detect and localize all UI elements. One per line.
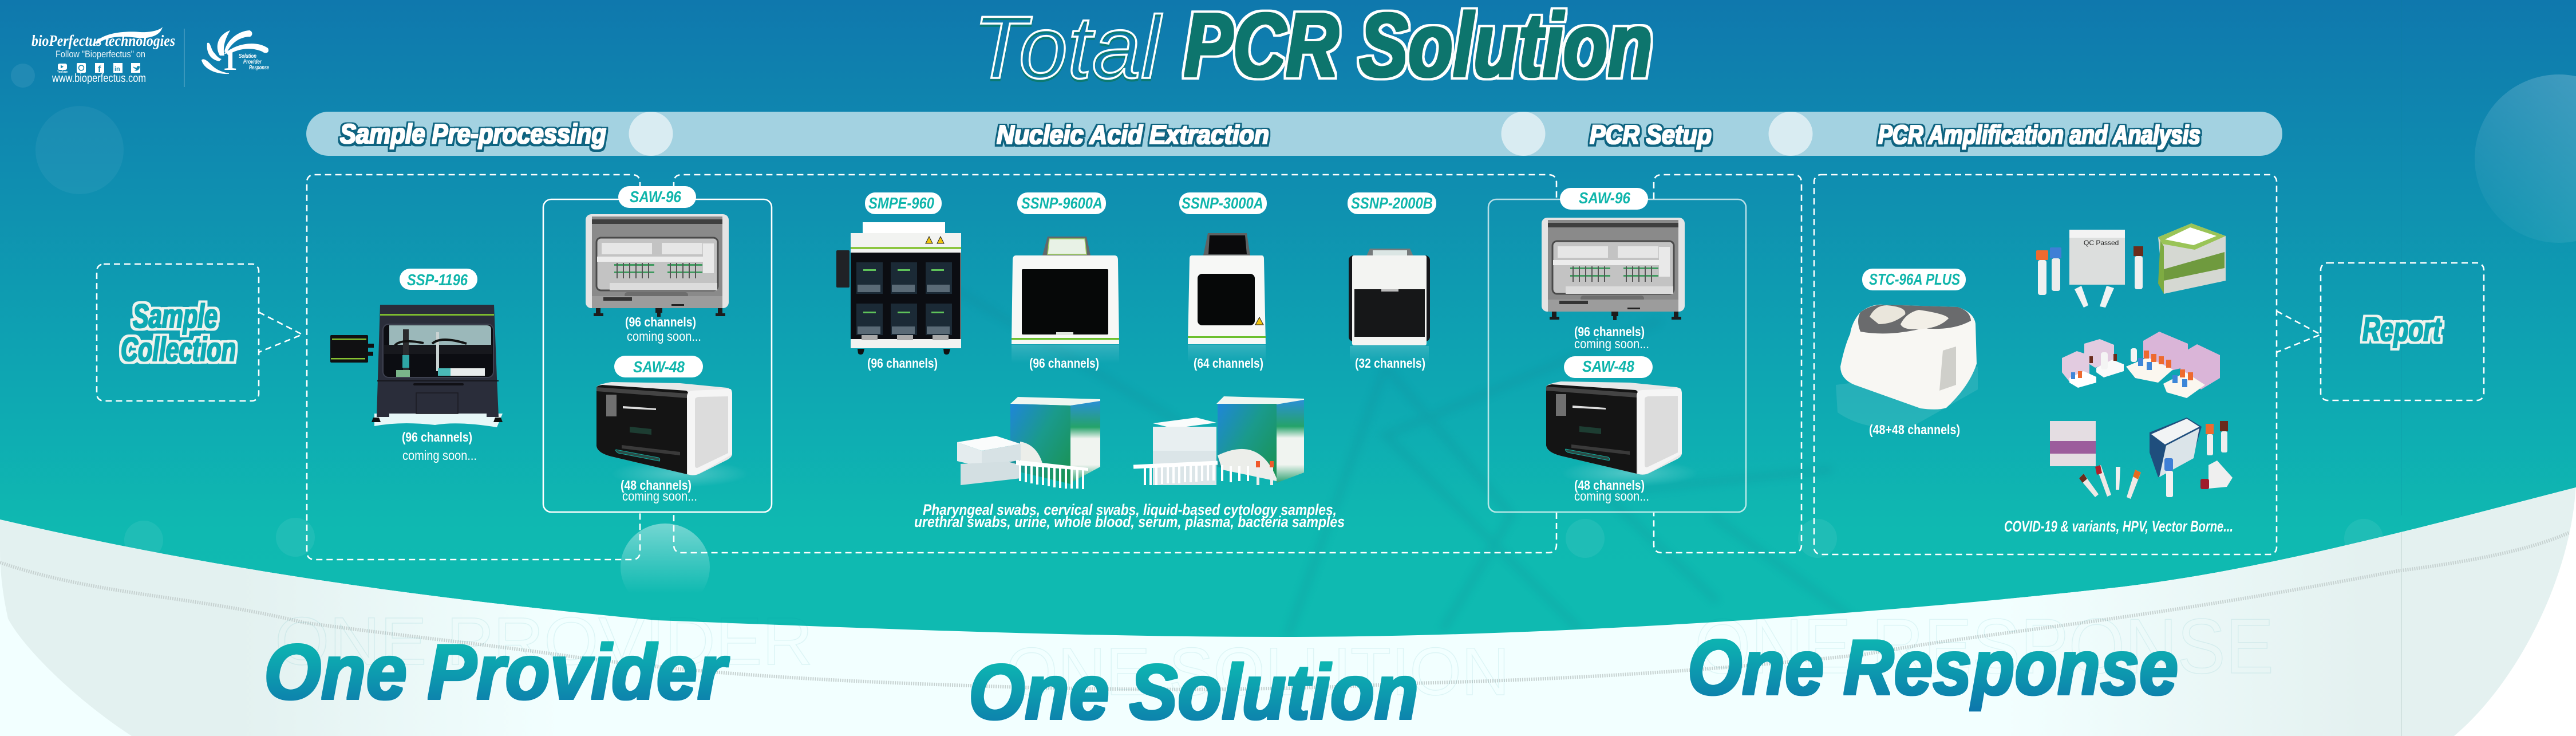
pill SAW-96: [1560, 188, 1648, 210]
pill SAW-48: [614, 356, 703, 377]
ghost outline words: ONE SOLUTION: [1006, 634, 1510, 710]
product row 3: PCR kits: [2050, 418, 2233, 499]
step: PCR amplification and analysis: PCR Amplification and Analysis: [1878, 120, 2200, 149]
status SAW-48: coming soon...: [1574, 489, 1649, 503]
product: extraction kit 1: [957, 397, 1100, 489]
one-solution logo mark: Response: [249, 65, 269, 71]
arrow: amplification to report: [2277, 311, 2321, 352]
brand logo block: [31, 27, 175, 85]
pill SAW-96: SAW-96: [630, 188, 681, 206]
seam line: [2401, 532, 2402, 736]
title word: Total: Total: [973, 0, 1163, 99]
one-solution logo mark: Provider: [243, 59, 262, 65]
heading: One Solution: One Solution: [969, 648, 1419, 735]
sample types text: urethral swabs, urine, whole blood, serum, plasma, bacteria samples: [914, 513, 1345, 530]
instrument: [1188, 233, 1266, 362]
product row 2: PCR kits: [2062, 332, 2220, 398]
one-solution logo mark: [202, 30, 269, 77]
sample types text: Pharyngeal swabs, cervical swabs, liquid-based cytology samples,: [923, 501, 1337, 518]
social icons: in: [114, 66, 120, 73]
pill SAW-96: [618, 186, 696, 208]
background decor: faint molecule streaks: [950, 286, 1860, 636]
panel: sample collection: Collection: [121, 331, 236, 368]
instrument SAW-48: [596, 382, 749, 487]
device: SMPE-960: [836, 192, 961, 371]
social icons: f: [98, 65, 101, 74]
pill: SSNP-9600A: [1021, 194, 1103, 212]
panel: SAW group right: [1488, 188, 1746, 512]
sample types text: [914, 501, 1345, 530]
device: SSNP-2000B: [1348, 192, 1436, 371]
device: SSNP-9600A: [1012, 192, 1119, 371]
heading: One Response: One Response: [1688, 624, 2178, 711]
device: SSP-1196: [330, 269, 503, 463]
social icons: [57, 63, 140, 74]
website: www.bioperfectus.com: [52, 72, 146, 85]
caption: (96 channels): [1029, 356, 1099, 371]
social icons: YouTube: [57, 70, 68, 74]
caption SAW-48: (48 channels): [1574, 478, 1645, 493]
caption SAW-96: (96 channels): [625, 314, 696, 329]
pill: STC-96A PLUS: [1869, 270, 1960, 288]
panel: nucleic acid extraction outline: [674, 175, 1556, 553]
status SAW-96: coming soon...: [1574, 336, 1649, 351]
pill: [1862, 269, 1966, 290]
panel: report: [2321, 263, 2484, 400]
bottom curved panel: [0, 481, 2576, 736]
product row 1: PCR kits: [2036, 223, 2226, 308]
channel caption: (96 channels): [402, 430, 472, 444]
device: SSNP-3000A: [1179, 192, 1267, 371]
process header bar: [306, 112, 2282, 156]
caption: (32 channels): [1355, 356, 1425, 371]
pill: SSNP-3000A: [1182, 194, 1263, 212]
step: sample pre-processing: Sample Pre-processing: [340, 119, 606, 149]
panel: PCR setup outline: [1654, 175, 1801, 553]
status caption: coming soon...: [402, 448, 477, 463]
instrument SAW-96: [1542, 218, 1685, 320]
pill SAW-48: SAW-48: [633, 358, 685, 376]
device: STC-96A PLUS: [1836, 269, 1978, 437]
title word: Total: Total: [973, 0, 1163, 97]
instrument: [1349, 249, 1430, 363]
one-solution logo mark: 1: [222, 42, 238, 77]
caption: (96 channels): [867, 356, 938, 371]
wordmark: bioPerfectus technologies: [31, 32, 175, 49]
pill: SSP-1196: [407, 271, 468, 289]
pill SAW-48: [1564, 356, 1653, 378]
caption: (64 channels): [1194, 356, 1263, 371]
panel: report: Report: [2362, 311, 2442, 348]
heading: One Provider: One Provider: [264, 628, 730, 715]
instrument: [1012, 237, 1119, 363]
seam line top: [2401, 0, 2402, 515]
panel: SAW group left: [543, 186, 772, 512]
step: PCR setup: PCR Setup: [1590, 120, 1712, 149]
step: nucleic acid extraction: Nucleic Acid Extraction: [997, 120, 1269, 149]
background decor: translucent circles: [11, 64, 2576, 611]
caption SAW-96: (96 channels): [1574, 324, 1645, 339]
pill: SMPE-960: [868, 194, 934, 212]
swoosh: [94, 27, 163, 44]
instrument: [836, 222, 961, 355]
one-solution logo mark: Solution: [239, 53, 256, 60]
panel: PCR amplification outline: [1814, 175, 2277, 554]
arrow: collection to pre-processing: [259, 312, 302, 352]
instrument: [330, 305, 503, 427]
follow line: Follow "Bioperfectus" on: [56, 49, 145, 60]
ghost outline words: ONE RESPONSE: [1694, 603, 2274, 690]
dotted arc: [0, 533, 2569, 690]
caption SAW-48: (48 channels): [621, 478, 692, 493]
product: extraction kit 2: [1133, 396, 1304, 485]
instrument: [1836, 305, 1978, 428]
panel: sample collection: [97, 264, 259, 401]
instrument SAW-96: [586, 214, 729, 317]
panel: sample pre-processing outline: [307, 175, 640, 560]
pill SAW-96: SAW-96: [1579, 189, 1630, 207]
product row 1: PCR kits: QC Passed: [2084, 239, 2119, 247]
pill SAW-48: SAW-48: [1582, 357, 1634, 375]
pill: SSNP-2000B: [1351, 194, 1433, 212]
panel: sample collection: Sample: [133, 298, 218, 335]
ghost outline words: ONE PROVIDER: [275, 604, 813, 679]
title: Total PCR Solution: [973, 0, 1653, 99]
ghost outline words: [275, 603, 2274, 710]
caption: (48+48 channels): [1869, 422, 1960, 437]
instrument SAW-48: [1546, 381, 1698, 487]
status SAW-96: coming soon...: [627, 329, 701, 344]
status SAW-48: coming soon...: [622, 489, 697, 503]
covid caption: COVID-19 & variants, HPV, Vector Borne...: [2004, 518, 2233, 535]
